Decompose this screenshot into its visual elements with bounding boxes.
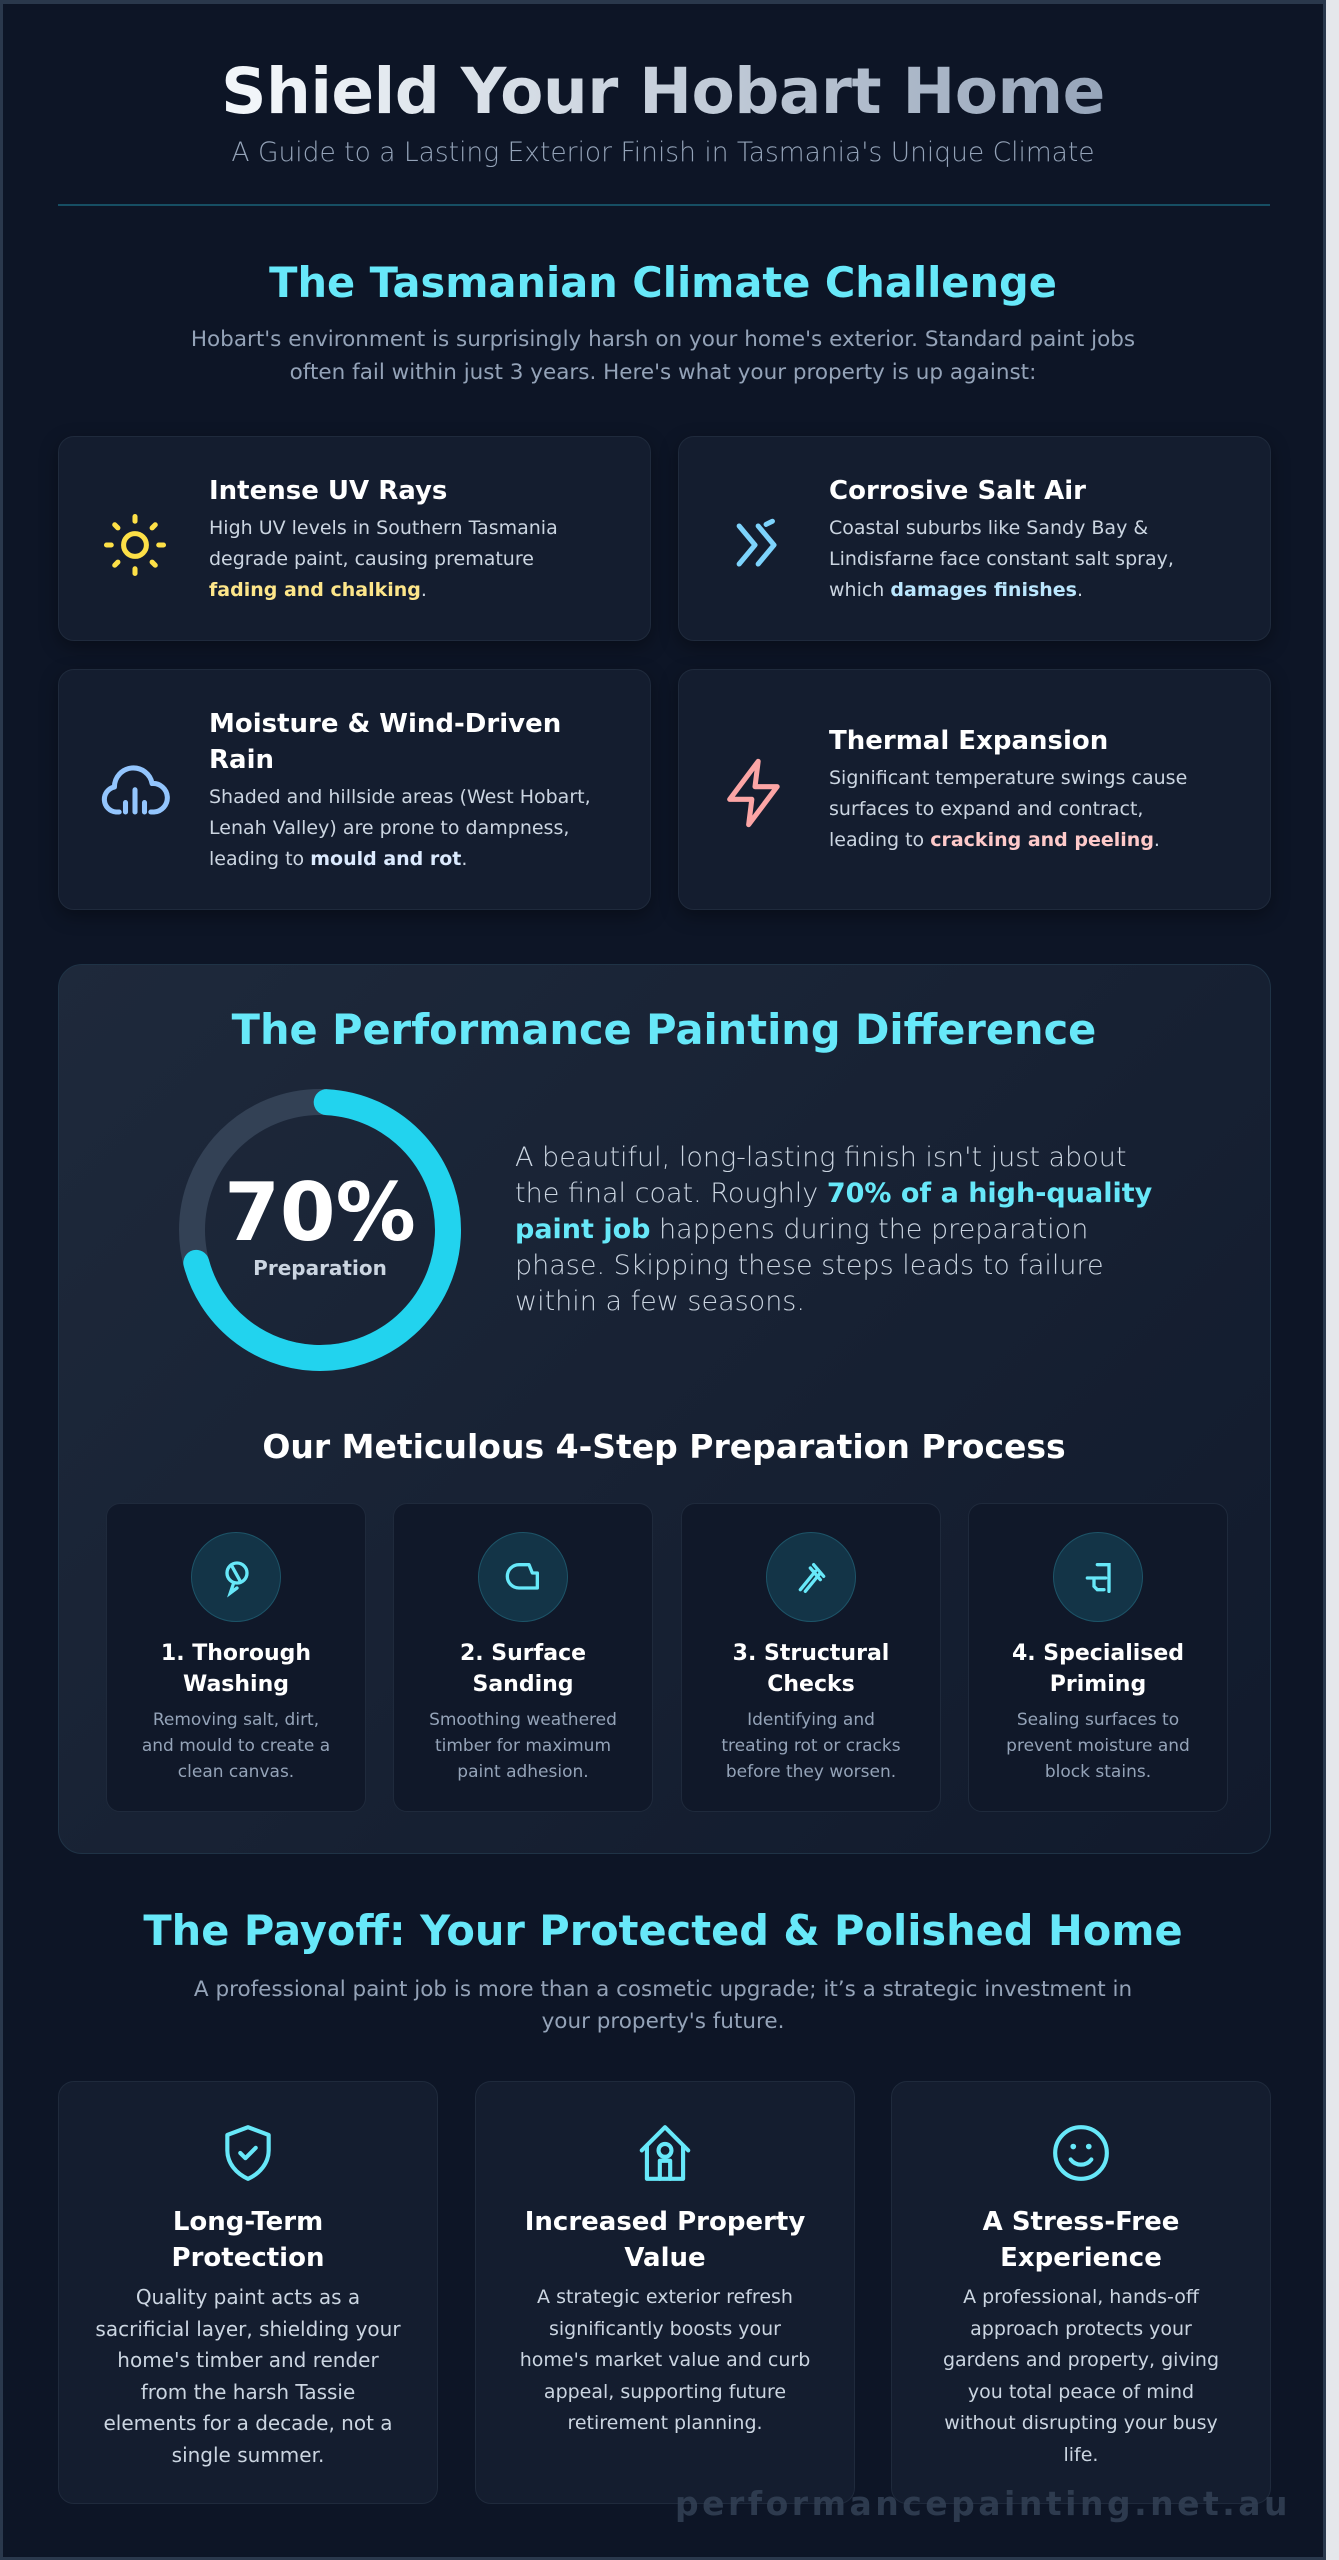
card: salt: Corrosive Salt Air: [829, 476, 1086, 506]
step 2: 2. Surface Sanding: [460, 1641, 586, 1697]
icon: sun: [104, 514, 166, 576]
step 2: Smoothing weathered timber for maximum paint adhesion.: [429, 1710, 617, 1782]
benefit 3: A Stress-Free Experience: [983, 2207, 1179, 2273]
icon: cloud rain: [102, 765, 170, 814]
icon: house: [640, 2125, 690, 2181]
benefit 1: [58, 2081, 438, 2504]
panel: performance difference: [58, 964, 1271, 1854]
benefit 1: Long-Term Protection: [172, 2207, 324, 2273]
step 1: [106, 1503, 366, 1812]
card: moisture: Shaded and hillside areas (West Hobart, Lenah Valley) are prone to dampness, leading to mould and rot.: [209, 786, 591, 870]
icon: sanding: [478, 1532, 568, 1622]
icon: shield: [225, 2125, 271, 2181]
benefit 1: Quality paint acts as a sacrificial layer, shielding your home's timber and render from the harsh Tassie elements for a decade, not a single summer.: [95, 2285, 401, 2466]
step 4: [968, 1503, 1228, 1812]
heading: difference: The Performance Painting Difference: [232, 1005, 1096, 1054]
donut chart 70%: [179, 1089, 461, 1371]
step 3: Identifying and treating rot or cracks before they worsen.: [721, 1710, 901, 1782]
card: moisture: Moisture & Wind-Driven Rain: [209, 709, 561, 775]
benefit 3: [891, 2081, 1271, 2504]
benefit 2: A strategic exterior refresh significantly boosts your home's market value and curb appeal, supporting future retirement planning.: [520, 2286, 810, 2434]
intro text: Hobart's environment is surprisingly harsh on your home's exterior. Standard paint jobs often fail within just 3 years. Here's what your property is up against:: [191, 327, 1135, 385]
title: [3, 52, 1323, 132]
subtitle: A Guide to a Lasting Exterior Finish in Tasmania's Unique Climate: [231, 137, 1095, 168]
watermark: performancepainting.net.au: [675, 2484, 1291, 2523]
card: UV: Intense UV Rays: [209, 476, 447, 506]
text: preparation: A beautiful, long-lasting finish isn't just about the final coat. Roughly 70% of a high-quality paint job happens during the preparation phase. Skipping these steps leads to failure within a few seasons.: [515, 1142, 1152, 1317]
step 2: [393, 1503, 653, 1812]
step 1: 1. Thorough Washing: [161, 1641, 311, 1697]
title: Shield Your Hobart Home: [221, 55, 1105, 128]
benefit 3: A professional, hands-off approach protects your gardens and property, giving you total peace of mind without disrupting your busy life.: [943, 2286, 1219, 2466]
heading: payoff: The Payoff: Your Protected & Polished Home: [143, 1906, 1183, 1955]
step 3: [681, 1503, 941, 1812]
donut chart 70%: 70%: [224, 1166, 416, 1259]
card: thermal: Significant temperature swings cause surfaces to expand and contract, leading to cracking and peeling.: [829, 767, 1187, 851]
payoff intro: A professional paint job is more than a cosmetic upgrade; it’s a strategic investment in your property's future.: [194, 1977, 1132, 2034]
icon: smile: [1053, 2125, 1109, 2181]
step 3: 3. Structural Checks: [733, 1641, 889, 1697]
card: UV: [58, 436, 651, 641]
icon: tools: [766, 1532, 856, 1622]
step 1: Removing salt, dirt, and mould to create a clean canvas.: [142, 1710, 330, 1782]
heading: climate challenge: The Tasmanian Climate Challenge: [269, 258, 1057, 307]
step 4: 4. Specialised Priming: [1012, 1641, 1184, 1697]
card: salt: [678, 436, 1271, 641]
card: moisture: [58, 669, 651, 910]
icon: wash: [191, 1532, 281, 1622]
icon: roller: [1053, 1532, 1143, 1622]
benefit 2: [475, 2081, 855, 2504]
step 4: Sealing surfaces to prevent moisture and block stains.: [1006, 1710, 1190, 1782]
card: thermal: [678, 669, 1271, 910]
icon: chevrons: [736, 518, 777, 566]
donut chart 70%: Preparation: [253, 1256, 387, 1280]
heading: 4 step: Our Meticulous 4-Step Preparation Process: [262, 1427, 1066, 1466]
card: UV: High UV levels in Southern Tasmania degrade paint, causing premature fading and chalking.: [209, 517, 558, 601]
card: thermal: Thermal Expansion: [829, 726, 1108, 756]
card: salt: Coastal suburbs like Sandy Bay & Lindisfarne face constant salt spray, which damages finishes.: [829, 517, 1174, 601]
icon: bolt: [727, 758, 780, 828]
benefit 2: Increased Property Value: [525, 2207, 805, 2273]
